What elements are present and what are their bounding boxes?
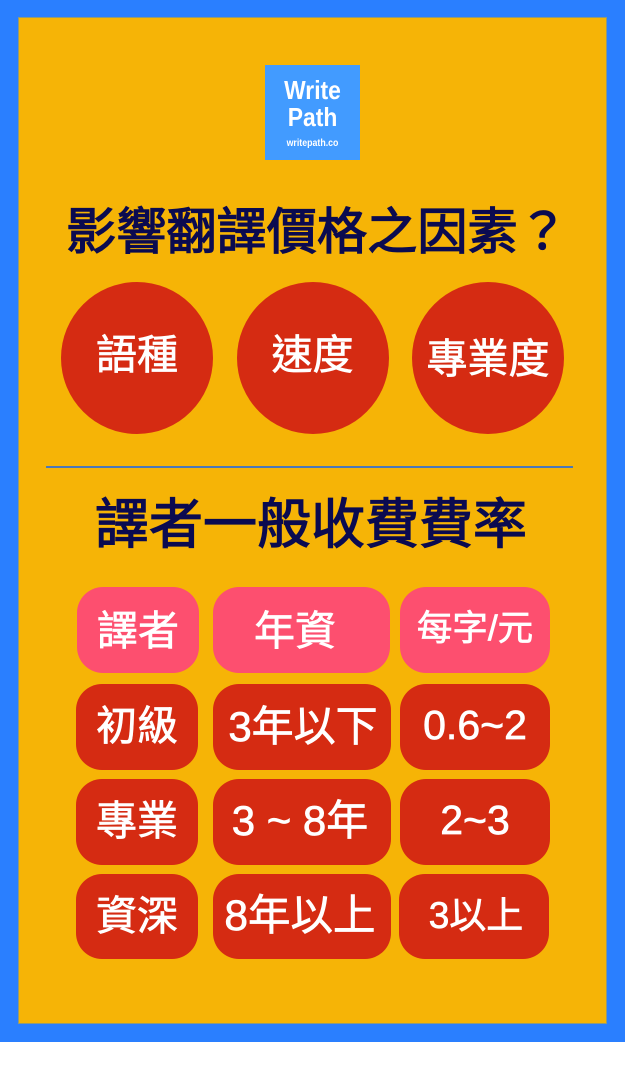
row: senior years: [213, 874, 391, 959]
circle label: 專業度: [426, 336, 550, 382]
logo name: Path: [288, 102, 337, 132]
row: junior level: [76, 684, 198, 770]
logo: [265, 65, 360, 160]
logo name: Write: [284, 75, 341, 105]
row: senior level: 資深: [96, 893, 178, 939]
circle: expertise: [412, 282, 564, 434]
row: professional years: [213, 779, 391, 865]
rate table: [76, 587, 550, 959]
header: per word price: 每字/元: [417, 608, 533, 648]
row: professional years: 3 ~ 8年: [232, 797, 368, 844]
header: translator: [77, 587, 199, 673]
circle: speed: [236, 282, 388, 434]
header: per word price: [400, 587, 550, 673]
row: junior rate: [400, 684, 550, 770]
circle label: 語種: [96, 332, 178, 378]
row: professional level: 專業: [96, 798, 178, 844]
section divider: [46, 466, 573, 468]
logo url: writepath.co: [287, 138, 338, 149]
logo name: [284, 75, 341, 132]
row: professional rate: 2~3: [440, 797, 510, 843]
row: professional rate: [400, 779, 550, 865]
row: junior level: 初級: [96, 703, 178, 749]
row: professional level: [76, 779, 198, 865]
row: junior years: [213, 684, 391, 770]
row: junior rate: 0.6~2: [423, 702, 527, 748]
row: senior rate: [399, 874, 549, 959]
header: years: [213, 587, 390, 673]
circle label: 速度: [272, 332, 354, 378]
header: translator: 譯者: [97, 608, 179, 654]
row: senior level: [76, 874, 198, 959]
header: years: 年資: [254, 608, 336, 654]
title: 影響翻譯價格之因素？: [66, 204, 568, 260]
row: senior years: 8年以上: [224, 893, 376, 940]
subtitle: 譯者一般收費費率: [95, 495, 527, 555]
row: junior years: 3年以下: [228, 703, 378, 750]
circle: language: [61, 282, 213, 434]
row: senior rate: 3以上: [429, 895, 523, 936]
